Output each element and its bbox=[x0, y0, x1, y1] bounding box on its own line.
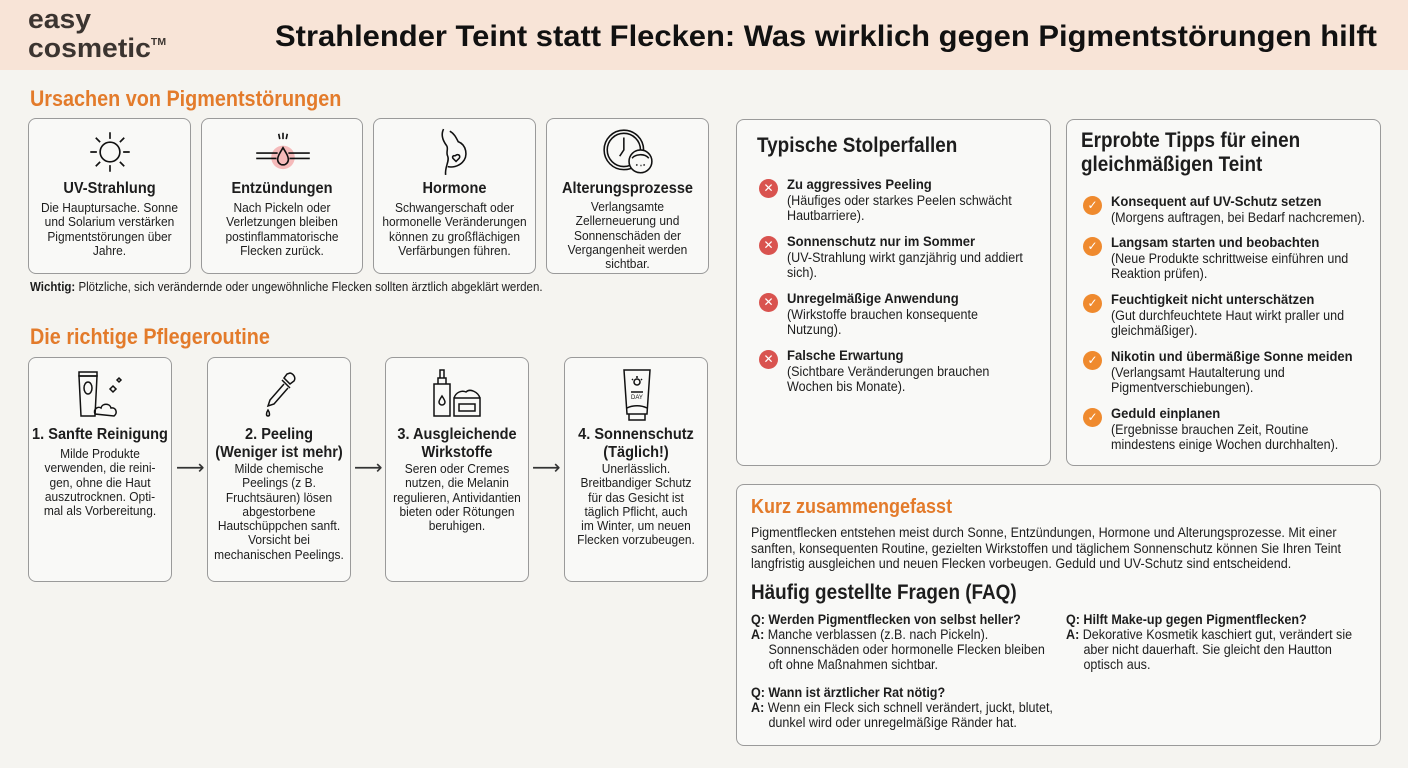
tip 5: mindestens einige Wochen durchhalten). bbox=[1111, 437, 1338, 452]
faq 3: aber nicht dauerhaft. Sie gleicht den Hautton bbox=[1083, 642, 1332, 657]
card: Hormone bbox=[373, 118, 536, 274]
faq 2: dunkel wird oder unregelmäßige Ränder hat. bbox=[768, 715, 1017, 730]
step 2: abgestorbene bbox=[242, 504, 316, 519]
card: Alterung: sichtbar. bbox=[605, 256, 650, 271]
step 2: Vorsicht bei bbox=[248, 532, 310, 547]
tip 2: Reaktion prüfen). bbox=[1111, 266, 1207, 281]
card: Alterung: Vergangenheit werden bbox=[568, 242, 687, 257]
panel: Tipps bbox=[1066, 119, 1381, 466]
step 2: Fruchtsäuren) lösen bbox=[226, 490, 332, 505]
item 4 bbox=[759, 347, 989, 394]
card: Entzündungen: Verletzungen bleiben bbox=[226, 214, 338, 229]
tip 2: Langsam starten und beobachten bbox=[1111, 234, 1319, 250]
panel: Stolperfallen: ✕ bbox=[763, 295, 774, 309]
card: Hormone: Schwangerschaft oder bbox=[395, 200, 514, 215]
step 1: mal als Vorbereitung. bbox=[44, 503, 156, 518]
tip 4: (Verlangsamt Hautalterung und bbox=[1111, 364, 1285, 380]
step 2: mechanischen Peelings. bbox=[214, 547, 344, 562]
logo: cosmeticTM bbox=[28, 33, 166, 63]
item 3: Unregelmäßige Anwendung bbox=[787, 290, 959, 306]
card: UV: Die Hauptursache. Sonne bbox=[41, 200, 178, 215]
step 1 bbox=[28, 357, 172, 582]
summary text bbox=[751, 525, 1341, 571]
faq 1: Q: Werden Pigmentflecken von selbst heller? bbox=[751, 612, 1021, 627]
item 3: Nutzung). bbox=[787, 322, 841, 337]
icon: cleanser bbox=[78, 371, 122, 417]
item 1: (Häufiges oder starkes Peelen schwächt bbox=[787, 192, 1012, 208]
step 2: 2. Peeling bbox=[245, 426, 313, 443]
icon: dropper bbox=[266, 372, 296, 417]
step 3: Seren oder Cremes bbox=[405, 461, 509, 476]
step 4: Breitbandiger Schutz bbox=[580, 475, 692, 490]
icon: serum and cream bbox=[433, 369, 481, 417]
logo: easy bbox=[28, 4, 91, 34]
header band bbox=[0, 0, 1408, 70]
panel: Stolperfallen: ✕ bbox=[763, 181, 774, 195]
card: UV: UV-Strahlung bbox=[63, 180, 156, 197]
icon: sunscreen tube bbox=[623, 369, 651, 421]
panel: Stolperfallen: ✕ bbox=[763, 238, 774, 252]
step 1: Milde Produkte bbox=[60, 446, 140, 461]
step 4 bbox=[564, 357, 708, 582]
tip 3 bbox=[1083, 291, 1344, 338]
heading: Ursachen: Ursachen von Pigmentstörungen bbox=[30, 86, 341, 111]
step 3: 3. Ausgleichende bbox=[397, 426, 517, 443]
icon: pregnancy bbox=[441, 128, 467, 175]
heading: Erprobte Tipps für einen bbox=[1081, 129, 1300, 152]
step 4: im Winter, um neuen bbox=[581, 518, 691, 533]
faq 1 bbox=[751, 612, 1045, 672]
faq 3: A: Dekorative Kosmetik kaschiert gut, verändert sie bbox=[1066, 627, 1352, 642]
icon: clock and face bbox=[603, 129, 653, 174]
card: Alterung: Sonnenschäden der bbox=[574, 228, 681, 243]
faq 1: Sonnenschäden oder hormonelle Flecken bleiben bbox=[768, 642, 1045, 657]
heading bbox=[1081, 129, 1300, 176]
card: UV: Jahre. bbox=[93, 243, 126, 258]
step 1: auszutrocknen. Opti- bbox=[45, 489, 155, 504]
summary text: langfristig ausgleichen und neuen Flecken vorbeugen. Geduld und UV-Schutz sind entscheidend. bbox=[751, 556, 1291, 571]
step 2: Milde chemische bbox=[234, 461, 324, 476]
tip 5 bbox=[1083, 405, 1338, 452]
step 4: Unerlässlich. bbox=[602, 461, 670, 476]
faq 3: Q: Hilft Make-up gegen Pigmentflecken? bbox=[1066, 612, 1307, 627]
tip 3: Feuchtigkeit nicht unterschätzen bbox=[1111, 291, 1314, 307]
step 3: bieten oder Rötungen bbox=[399, 504, 515, 519]
card: Hormone: Verfärbungen führen. bbox=[398, 243, 511, 258]
card: Entzündungen: Flecken zurück. bbox=[240, 243, 324, 258]
step 2: Peelings (z B. bbox=[242, 475, 316, 490]
item 3 bbox=[759, 290, 978, 337]
panel: Stolperfallen bbox=[736, 119, 1051, 466]
step 3 bbox=[385, 357, 529, 582]
item 2 bbox=[759, 233, 1023, 280]
card: Alterung: Zellerneuerung und bbox=[576, 213, 679, 228]
step 4: Flecken vorzubeugen. bbox=[577, 532, 695, 547]
step 2: (Weniger ist mehr) bbox=[215, 444, 343, 461]
tip 4: Nikotin und übermäßige Sonne meiden bbox=[1111, 348, 1353, 364]
step 3: regulieren, Antividantien bbox=[393, 490, 521, 505]
heading: gleichmäßigen Teint bbox=[1081, 153, 1262, 176]
panel: summary and FAQ bbox=[736, 484, 1381, 746]
step 4: (Täglich!) bbox=[603, 444, 669, 461]
icon: sun bbox=[90, 132, 130, 172]
card: Entzündungen bbox=[201, 118, 363, 274]
panel: Stolperfallen: ✕ bbox=[763, 352, 774, 366]
item 4: Falsche Erwartung bbox=[787, 347, 903, 363]
tip 2 bbox=[1083, 234, 1348, 281]
step 3: beruhigen. bbox=[429, 518, 485, 533]
card: UV: und Solarium verstärken bbox=[45, 214, 174, 229]
panel: Tipps: ✓ bbox=[1087, 353, 1098, 367]
arrow 3: ⟶ bbox=[532, 455, 561, 479]
faq 3: optisch aus. bbox=[1083, 657, 1150, 672]
step 4: 4. Sonnenschutz bbox=[578, 426, 694, 443]
item 2: sich). bbox=[787, 265, 817, 280]
faq 2: Q: Wann ist ärztlicher Rat nötig? bbox=[751, 685, 945, 700]
icon: sunscreen tube: DAY bbox=[631, 395, 643, 401]
step 4: täglich Pflicht, auch bbox=[584, 504, 688, 519]
card: Alterung: Alterungsprozesse bbox=[562, 180, 693, 197]
card: Hormone: hormonelle Veränderungen bbox=[382, 214, 527, 229]
step 1: 1. Sanfte Reinigung bbox=[32, 426, 168, 443]
tip 2: (Neue Produkte schrittweise einführen und bbox=[1111, 250, 1348, 266]
step 1: verwenden, die reini- bbox=[44, 460, 156, 475]
step 1: gen, ohne die Haut bbox=[49, 475, 151, 490]
tip 1: (Morgens auftragen, bei Bedarf nachcremen). bbox=[1111, 210, 1365, 224]
panel: Tipps: ✓ bbox=[1087, 198, 1098, 212]
heading: Typische Stolperfallen bbox=[757, 134, 957, 157]
title: Strahlender Teint statt Flecken: Was wirklich gegen Pigmentstörungen hilft bbox=[275, 20, 1377, 53]
summary text: sanften, konsequenten Routine, gezielten Wirkstoffen und täglichem Sonnenschutz können Sie Ihren Teint bbox=[751, 540, 1341, 556]
faq 1: oft ohne Maßnahmen sichtbar. bbox=[768, 657, 938, 672]
item 1 bbox=[759, 176, 1012, 223]
item 3: (Wirkstoffe brauchen konsequente bbox=[787, 306, 978, 322]
tip 4: Pigmentverschiebungen). bbox=[1111, 380, 1253, 395]
tip 1: Konsequent auf UV-Schutz setzen bbox=[1111, 193, 1322, 209]
panel: routine steps bbox=[28, 357, 708, 582]
card: Hormone: können zu großflächigen bbox=[389, 229, 520, 244]
item 4: (Sichtbare Veränderungen brauchen bbox=[787, 364, 989, 378]
step 3: Wirkstoffe bbox=[421, 444, 493, 461]
panel: causes bbox=[28, 118, 709, 274]
arrow 1: ⟶ bbox=[176, 455, 205, 479]
step 3: nutzen, die Melanin bbox=[405, 475, 509, 490]
heading: Kurz zusammengefasst: Kurz zusammengefasst bbox=[751, 496, 952, 518]
item 1: Zu aggressives Peeling bbox=[787, 176, 932, 192]
heading: Pflegeroutine: Die richtige Pflegeroutine bbox=[30, 324, 270, 349]
icon: inflamed skin bbox=[256, 132, 310, 170]
step 4: für das Gesicht ist bbox=[588, 490, 684, 505]
card: Alterung: Verlangsamte bbox=[591, 199, 664, 214]
summary text: Pigmentflecken entstehen meist durch Sonne, Entzündungen, Hormone und Alterungsprozesse. Mit einer bbox=[751, 525, 1337, 540]
tip 4 bbox=[1083, 348, 1353, 395]
faq 2: A: Wenn ein Fleck sich schnell verändert, juckt, blutet, bbox=[751, 700, 1053, 715]
tip 3: gleichmäßiger). bbox=[1111, 323, 1198, 338]
item 2: Sonnenschutz nur im Sommer bbox=[787, 233, 975, 249]
step 2: Hautschüppchen sanft. bbox=[218, 518, 340, 533]
card: Alterung bbox=[546, 118, 709, 274]
tip 5: (Ergebnisse brauchen Zeit, Routine bbox=[1111, 422, 1309, 436]
card: UV bbox=[28, 118, 191, 274]
faq 3 bbox=[1066, 612, 1352, 672]
faq 2 bbox=[751, 685, 1053, 730]
tip 1 bbox=[1083, 193, 1365, 225]
item 4: Wochen bis Monate). bbox=[787, 379, 905, 394]
card: UV: Pigmentstörungen über bbox=[47, 229, 172, 244]
faq 1: A: Manche verblassen (z.B. nach Pickeln). bbox=[751, 627, 988, 642]
panel: Tipps: ✓ bbox=[1087, 296, 1098, 310]
card: Entzündungen: postinflammatorische bbox=[225, 229, 338, 244]
card: Hormone: Hormone bbox=[423, 180, 486, 197]
card: Entzündungen: Entzündungen bbox=[231, 180, 333, 197]
tip 5: Geduld einplanen bbox=[1111, 405, 1220, 421]
arrow 2: ⟶ bbox=[354, 455, 383, 479]
card: Entzündungen: Nach Pickeln oder bbox=[233, 200, 331, 215]
item 2: (UV-Strahlung wirkt ganzjährig und addiert bbox=[787, 250, 1023, 264]
item 1: Hautbarriere). bbox=[787, 208, 864, 223]
panel: Tipps: ✓ bbox=[1087, 239, 1098, 253]
panel: Tipps: ✓ bbox=[1087, 410, 1098, 424]
tip 3: (Gut durchfeuchtete Haut wirkt praller und bbox=[1111, 308, 1344, 322]
step 2 bbox=[207, 357, 351, 582]
heading: FAQ: Häufig gestellte Fragen (FAQ) bbox=[751, 581, 1017, 604]
note: Wichtig: Wichtig: Plötzliche, sich verändernde oder ungewöhnliche Flecken sollten ärztlich abgeklärt werden. bbox=[30, 280, 543, 294]
logo bbox=[28, 4, 166, 63]
